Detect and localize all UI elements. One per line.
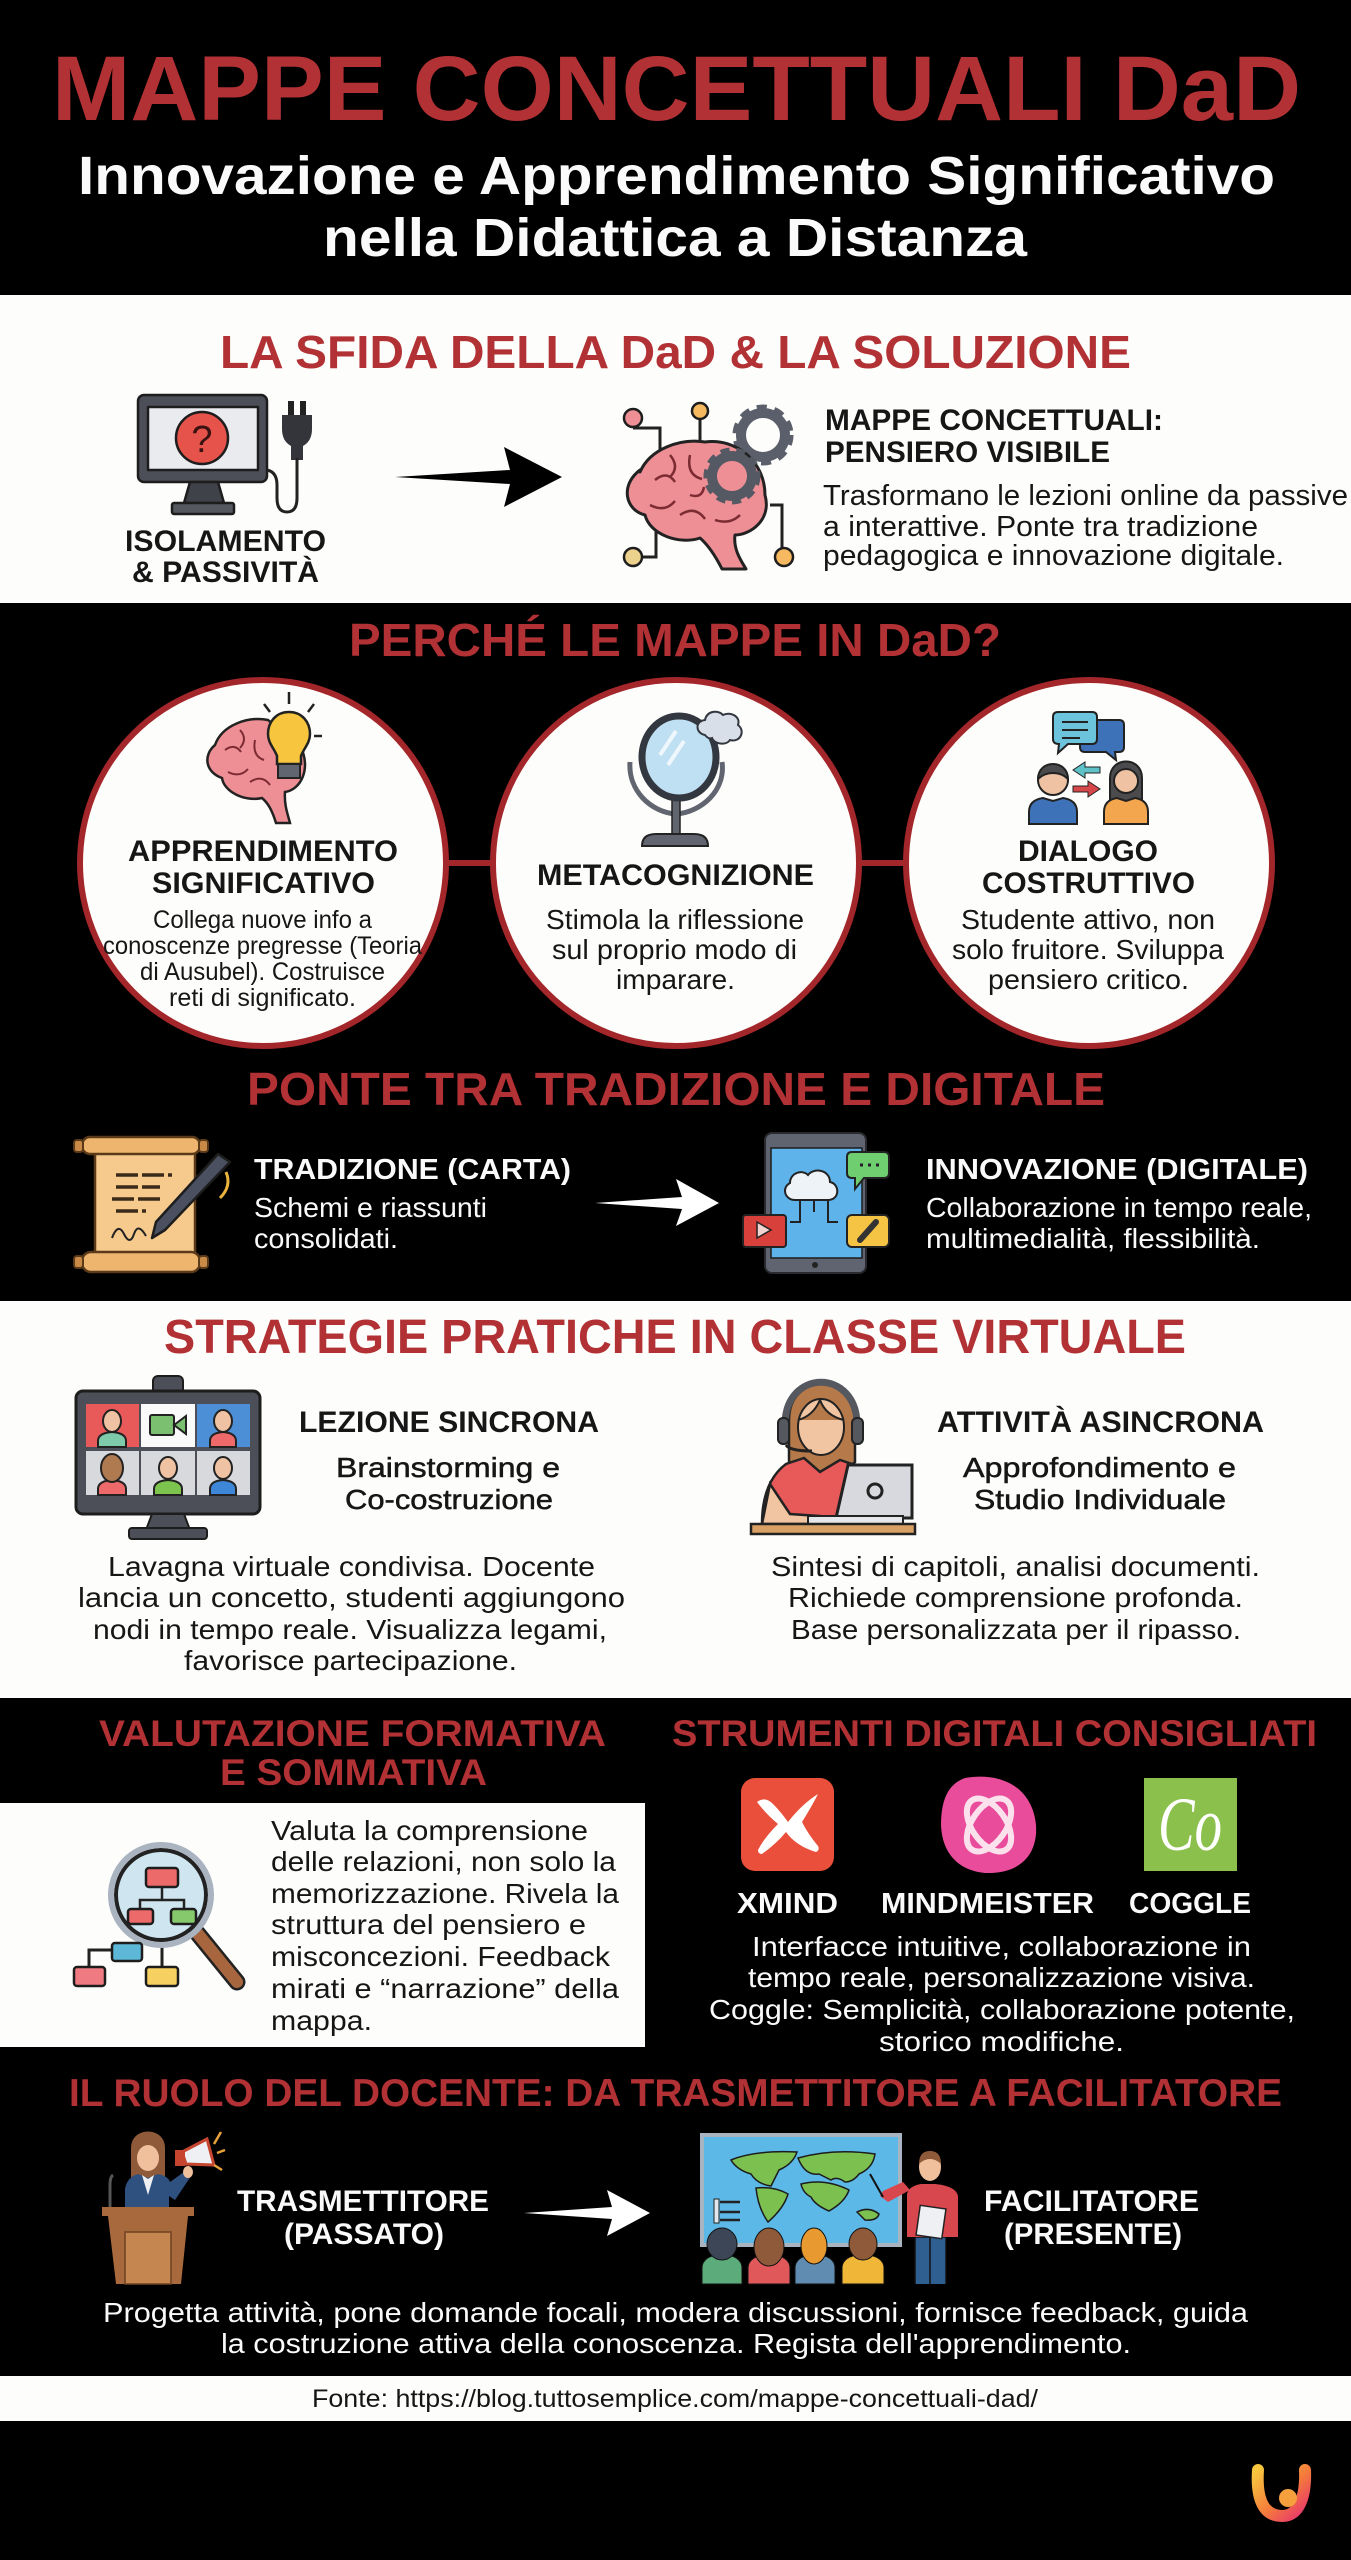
text: innovazione: INNOVAZIONE (DIGITALE)	[926, 1154, 1308, 1186]
text: lezione sincrona: LEZIONE SINCRONA	[299, 1406, 599, 1439]
labels: tool names: MINDMEISTER	[881, 1888, 1094, 1920]
icon: video call monitor	[76, 1376, 260, 1539]
text: sintesi di capitoli: Richiede comprensione profonda.	[788, 1582, 1243, 1613]
text: lezione sincrona: Brainstorming e	[336, 1452, 560, 1483]
icon: paper scroll and pen	[74, 1137, 230, 1272]
heading: la sfida: LA SFIDA DELLA DaD & LA SOLUZIONE	[220, 326, 1131, 378]
text: pensiero visibile: PENSIERO VISIBILE	[825, 436, 1110, 469]
text: tradizione: TRADIZIONE (CARTA)	[254, 1154, 571, 1186]
icon: student with headset and laptop	[751, 1382, 915, 1534]
icon: brain with gears and nodes	[624, 403, 793, 569]
text: lavagna virtuale: Lavagna virtuale condivisa. Docente	[108, 1551, 595, 1582]
text: progetta attività: la costruzione attiva della conoscenza. Regista dell'apprendimento.	[221, 2328, 1131, 2359]
text: innovazione: multimedialità, flessibilità.	[926, 1223, 1260, 1254]
icon: brain with light bulb	[207, 692, 322, 823]
icon: mindmeister	[941, 1777, 1036, 1873]
label: apprendimento significativo: SIGNIFICATIVO	[152, 867, 375, 900]
icon: xmind	[741, 1778, 834, 1871]
text: collega nuove info: Collega nuove info a	[153, 906, 372, 934]
text: pensiero visibile: Trasformano le lezioni online da passive	[823, 480, 1348, 512]
text: lavagna virtuale	[78, 1551, 625, 1676]
text: lezione sincrona: Co-costruzione	[345, 1484, 553, 1515]
label: dialogo costruttivo: COSTRUTTIVO	[982, 867, 1195, 900]
label: facilitatore: FACILITATORE	[984, 2185, 1199, 2218]
labels: tool names	[737, 1888, 1251, 1920]
icon: tablet with cloud	[743, 1133, 889, 1273]
text: interfacce intuitive: Interfacce intuitive, collaborazione in	[752, 1931, 1251, 1962]
text: stimola la riflessione: sul proprio modo di	[552, 934, 797, 965]
source footer	[0, 2376, 1351, 2421]
text: innovazione	[926, 1154, 1312, 1254]
text: lavagna virtuale: lancia un concetto, studenti aggiungono	[78, 1582, 625, 1613]
label: trasmettitore	[237, 2185, 489, 2251]
icon: two people in dialogue	[1029, 712, 1148, 824]
text: tradizione: consolidati.	[254, 1223, 398, 1254]
arrow: white	[595, 1179, 719, 1226]
text: valuta la comprensione: Valuta la comprensione	[271, 1815, 588, 1846]
text: pensiero visibile: pedagogica e innovazione digitale.	[823, 540, 1284, 572]
text: sintesi di capitoli	[771, 1551, 1260, 1645]
text: sintesi di capitoli: Sintesi di capitoli, analisi documenti.	[771, 1551, 1260, 1582]
panel: strategie pratiche	[0, 1301, 1351, 1698]
panel: ponte tra tradizione e digitale	[74, 1063, 1312, 1273]
text: progetta attività	[103, 2297, 1248, 2359]
text: studente attivo: pensiero critico.	[988, 964, 1189, 995]
heading: strumenti: STRUMENTI DIGITALI CONSIGLIATI	[672, 1713, 1317, 1754]
panel: valutazione	[0, 1713, 645, 2047]
label: facilitatore: (PRESENTE)	[1004, 2218, 1182, 2251]
subtitle	[78, 146, 1275, 268]
text: lezione sincrona	[299, 1406, 599, 1515]
text: sintesi di capitoli: Base personalizzata per il ripasso.	[791, 1614, 1241, 1645]
circle: metacognizione	[493, 680, 859, 1046]
label: apprendimento significativo: APPRENDIMENTO	[128, 835, 398, 868]
heading: valutazione	[99, 1713, 606, 1793]
heading: perché: PERCHÉ LE MAPPE IN DaD?	[349, 614, 1001, 666]
text: attività asincrona: Studio Individuale	[974, 1484, 1226, 1515]
label: facilitatore	[984, 2185, 1199, 2251]
text: attività asincrona	[937, 1405, 1264, 1515]
text: valuta la comprensione: delle relazioni, non solo la	[271, 1846, 616, 1877]
text: collega nuove info: di Ausubel). Costruisce	[140, 958, 385, 986]
text: pensiero visibile	[823, 404, 1348, 572]
label: metacognizione: METACOGNIZIONE	[537, 859, 814, 892]
text: stimola la riflessione	[546, 904, 804, 995]
text: attività asincrona: ATTIVITÀ ASINCRONA	[937, 1405, 1264, 1439]
text: valuta la comprensione: misconcezioni. Feedback	[271, 1941, 611, 1972]
heading: ponte: PONTE TRA TRADIZIONE E DIGITALE	[247, 1063, 1105, 1115]
circle: dialogo costruttivo	[906, 680, 1272, 1046]
text: collega nuove info: reti di significato.	[169, 984, 356, 1012]
text: lavagna virtuale: favorisce partecipazione.	[184, 1645, 517, 1676]
label: dialogo costruttivo	[982, 835, 1195, 900]
text: interfacce intuitive: Coggle: Semplicità, collaborazione potente,	[709, 1994, 1295, 2025]
text: interfacce intuitive	[709, 1931, 1295, 2057]
text: interfacce intuitive: storico modifiche.	[879, 2026, 1124, 2057]
heading: valutazione: VALUTAZIONE FORMATIVA	[99, 1713, 606, 1754]
text: attività asincrona: Approfondimento e	[963, 1452, 1236, 1483]
label: isolamento e passività: ISOLAMENTO	[125, 525, 326, 558]
text: pensiero visibile: a interattive. Ponte tra tradizione	[823, 511, 1258, 543]
label: trasmettitore: TRASMETTITORE	[237, 2185, 489, 2218]
text: valuta la comprensione: mappa.	[271, 2005, 372, 2036]
icon: magnifier over concept map	[74, 1845, 237, 1986]
text: tradizione: Schemi e riassunti	[254, 1192, 487, 1223]
text: stimola la riflessione: Stimola la riflessione	[546, 904, 804, 935]
text: valuta la comprensione	[271, 1815, 619, 2036]
labels: tool names: COGGLE	[1129, 1888, 1251, 1920]
icon: coggle: Co	[1158, 1783, 1222, 1867]
text: valuta la comprensione: struttura del pensiero e	[271, 1909, 586, 1940]
circle: apprendimento significativo	[80, 680, 446, 1046]
label: isolamento e passività	[125, 525, 326, 589]
connectors	[446, 860, 905, 866]
labels: tool names: XMIND	[737, 1888, 838, 1920]
text: studente attivo	[952, 904, 1224, 995]
panel: ruolo del docente	[69, 2072, 1282, 2359]
text: pensiero visibile: MAPPE CONCETTUALI:	[825, 404, 1163, 437]
heading: ruolo: IL RUOLO DEL DOCENTE: DA TRASMETTITORE A FACILITATORE	[69, 2072, 1282, 2115]
text: stimola la riflessione: imparare.	[616, 964, 735, 995]
arrow: black	[395, 447, 562, 507]
text: studente attivo: solo fruitore. Sviluppa	[952, 934, 1224, 965]
text: valuta la comprensione: memorizzazione. Rivela la	[271, 1878, 619, 1909]
label: isolamento e passività: & PASSIVITÀ	[132, 555, 319, 589]
subtitle: nella Didattica a Distanza	[323, 208, 1028, 268]
text: tradizione	[254, 1154, 571, 1254]
header panel	[0, 0, 1351, 295]
icon: mirror and thought cloud	[630, 712, 742, 846]
text: progetta attività: Progetta attività, pone domande focali, modera discussioni, fornisce feedback, guida	[103, 2297, 1248, 2328]
label: apprendimento significativo	[128, 835, 398, 900]
source footer: Fonte: https://blog.tuttosemplice.com/mappe-concettuali-dad/	[312, 2385, 1038, 2413]
label: dialogo costruttivo: DIALOGO	[1018, 835, 1158, 868]
text: studente attivo: Studente attivo, non	[961, 904, 1215, 935]
white box	[0, 1803, 645, 2047]
text: collega nuove info	[103, 906, 422, 1012]
icon: speaker at podium with megaphone	[102, 2132, 225, 2284]
heading: strategie: STRATEGIE PRATICHE IN CLASSE VIRTUALE	[164, 1311, 1186, 1364]
panel: la sfida e la soluzione	[0, 295, 1351, 603]
icon: logo	[1258, 2470, 1305, 2516]
icon: monitor with question mark	[138, 395, 312, 514]
title: MAPPE CONCETTUALI DaD	[52, 38, 1301, 140]
heading: valutazione: E SOMMATIVA	[220, 1752, 487, 1793]
icon: facilitator with world map and students	[702, 2135, 958, 2284]
icon: monitor with question mark: ?	[191, 419, 213, 461]
text: valuta la comprensione: mirati e “narrazione” della	[271, 1973, 619, 2004]
text: collega nuove info: conoscenze pregresse (Teoria	[103, 932, 422, 960]
text: lavagna virtuale: nodi in tempo reale. Visualizza legami,	[93, 1614, 607, 1645]
panel: perché le mappe	[80, 614, 1272, 1046]
text: innovazione: Collaborazione in tempo reale,	[926, 1192, 1312, 1223]
label: trasmettitore: (PASSATO)	[284, 2218, 444, 2251]
arrow: white	[524, 2190, 650, 2236]
text: interfacce intuitive: tempo reale, personalizzazione visiva.	[748, 1962, 1255, 1993]
panel: strumenti digitali	[672, 1713, 1317, 2057]
subtitle: Innovazione e Apprendimento Significativo	[78, 146, 1275, 206]
